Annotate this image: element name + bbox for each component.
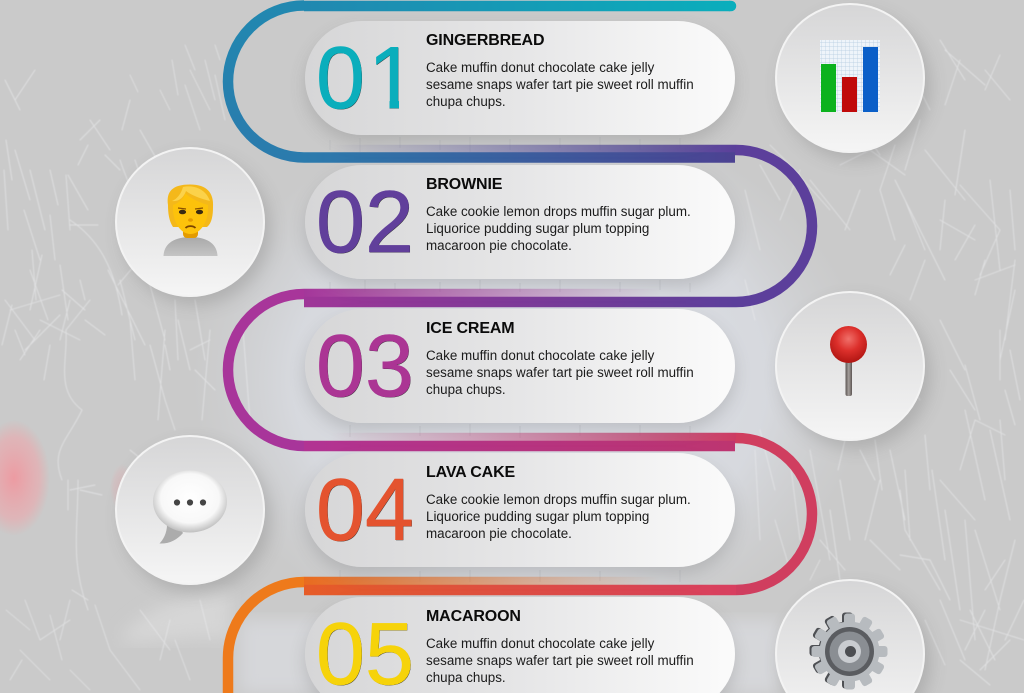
text block: brownie bbox=[426, 204, 691, 253]
text block: ice cream: sesame snaps wafer tart pie sweet roll muffin bbox=[426, 365, 694, 380]
icon badge: speech bubble bbox=[115, 435, 265, 585]
icon badge: bar chart bbox=[775, 3, 925, 153]
text block: gingerbread bbox=[426, 60, 694, 109]
text block: macaroon: sesame snaps wafer tart pie sweet roll muffin bbox=[426, 653, 694, 668]
icon: bar chart bbox=[820, 40, 880, 112]
text block: lava cake bbox=[426, 492, 691, 541]
panel: brownie bbox=[305, 165, 735, 279]
icon badge: pushpin bbox=[775, 291, 925, 441]
panel: macaroon bbox=[305, 597, 735, 693]
text block: brownie: macaroon pie chocolate. bbox=[426, 238, 572, 253]
heading: macaroon: MACAROON bbox=[426, 608, 521, 625]
number 02: 02 bbox=[316, 172, 414, 271]
panel: gingerbread bbox=[305, 21, 735, 135]
heading: gingerbread: GINGERBREAD bbox=[426, 32, 544, 49]
icon: person bbox=[164, 184, 218, 256]
text block: lava cake: macaroon pie chocolate. bbox=[426, 526, 572, 541]
icon: pushpin bbox=[830, 326, 867, 396]
text block: macaroon: chupa chups. bbox=[426, 670, 506, 685]
heading: ice cream: ICE CREAM bbox=[426, 320, 514, 337]
text block: gingerbread: Cake muffin donut chocolate cake jelly bbox=[426, 60, 654, 75]
text block: lava cake: Cake cookie lemon drops muffin sugar plum. bbox=[426, 492, 691, 507]
text block: brownie: Liquorice pudding sugar plum topping bbox=[426, 221, 649, 236]
text block: ice cream bbox=[426, 348, 694, 397]
number 01 bbox=[316, 28, 399, 127]
number 01: 1 bbox=[368, 28, 417, 127]
number 01: 0 bbox=[316, 28, 365, 127]
icon badge: person bbox=[115, 147, 265, 297]
text block: gingerbread: sesame snaps wafer tart pie sweet roll muffin bbox=[426, 77, 694, 92]
heading: lava cake: LAVA CAKE bbox=[426, 464, 515, 481]
icon: speech bubble bbox=[153, 470, 227, 544]
text block: gingerbread: chupa chups. bbox=[426, 94, 506, 109]
icon badge: gear bbox=[775, 579, 925, 693]
heading: brownie: BROWNIE bbox=[426, 176, 502, 193]
text block: macaroon: Cake muffin donut chocolate cake jelly bbox=[426, 636, 654, 651]
text block: macaroon bbox=[426, 636, 694, 685]
text block: ice cream: chupa chups. bbox=[426, 382, 506, 397]
text block: ice cream: Cake muffin donut chocolate cake jelly bbox=[426, 348, 654, 363]
icon: gear bbox=[810, 612, 888, 690]
number 04: 04 bbox=[316, 460, 414, 559]
panel: lava cake bbox=[305, 453, 735, 567]
text block: brownie: Cake cookie lemon drops muffin sugar plum. bbox=[426, 204, 691, 219]
text block: lava cake: Liquorice pudding sugar plum topping bbox=[426, 509, 649, 524]
panel: ice cream bbox=[305, 309, 735, 423]
number 03: 03 bbox=[316, 316, 414, 415]
